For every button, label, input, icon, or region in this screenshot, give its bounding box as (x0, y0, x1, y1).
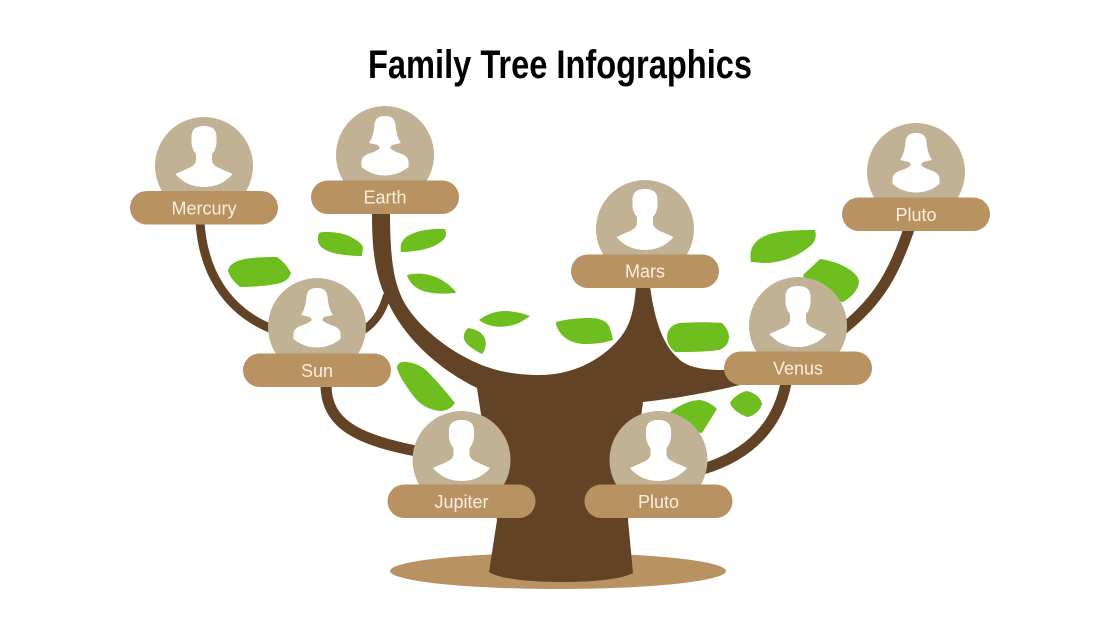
label: Pluto (895, 205, 937, 225)
name pill (571, 254, 719, 288)
leaf: near Mercury branch (228, 257, 291, 287)
portrait circle (412, 411, 510, 509)
portrait circle (867, 123, 965, 221)
branch: Sun to Earth stem (362, 295, 387, 331)
leaf: behind lower Pluto (670, 400, 717, 433)
label: Sun (301, 361, 333, 381)
name pill (243, 354, 391, 387)
leaf: left of Earth stem (318, 232, 363, 256)
node: Mercury (130, 117, 278, 224)
leaf: right of Earth stem lower (407, 274, 456, 294)
label: Mercury (171, 198, 237, 218)
label: Earth (363, 188, 407, 208)
icon: male silhouette (433, 420, 490, 481)
icon: male silhouette (770, 286, 826, 347)
name pill (388, 484, 536, 518)
tree trunk (372, 212, 740, 582)
icon: male silhouette (616, 189, 674, 250)
node: Pluto upper (842, 123, 990, 231)
leaf: above Jupiter (397, 362, 455, 411)
label: Jupiter (434, 492, 489, 512)
leaf: below Venus (730, 391, 762, 417)
portrait circle (596, 180, 694, 278)
label: Venus (773, 358, 823, 378)
icon: male silhouette (176, 126, 232, 187)
node: Jupiter (388, 411, 536, 518)
label: Mars (625, 262, 665, 282)
icon: female silhouette (892, 133, 940, 192)
name pill (584, 484, 732, 518)
leaf: large upper right (750, 230, 816, 263)
name pill (130, 191, 278, 224)
title: Family Tree Infographics (368, 43, 752, 87)
portrait circle (268, 278, 366, 376)
branch: Mercury to Sun (200, 222, 272, 329)
branch: Sun to Jupiter (326, 385, 416, 451)
branch: Venus to lower Pluto (703, 383, 786, 469)
node: Pluto lower (584, 411, 732, 518)
icon: male silhouette (630, 420, 687, 481)
icon: female silhouette (294, 288, 340, 348)
name pill (311, 180, 459, 214)
leaf: small centre lower (464, 328, 486, 354)
portrait circle (610, 411, 708, 509)
thin branches (200, 222, 909, 469)
node: Venus (724, 277, 872, 385)
portrait circle (336, 106, 434, 204)
name pill (724, 352, 872, 385)
leaves (228, 229, 859, 433)
portrait circle (749, 277, 847, 375)
leaf: right of Earth stem upper (401, 229, 446, 252)
node: Earth (311, 106, 459, 214)
leaf: behind Venus (803, 259, 859, 302)
label: Pluto (638, 492, 679, 512)
ground ellipse (390, 553, 726, 589)
name pill (842, 198, 990, 231)
leaf: centre (556, 318, 613, 344)
leaf: small centre upper (479, 311, 530, 327)
leaf: right of Mars stem (667, 322, 729, 352)
node: Sun (243, 278, 391, 387)
node: Mars (571, 180, 719, 288)
icon: female silhouette (362, 116, 408, 176)
portrait circle (155, 117, 253, 215)
branch: upper Pluto to Venus (843, 229, 909, 329)
